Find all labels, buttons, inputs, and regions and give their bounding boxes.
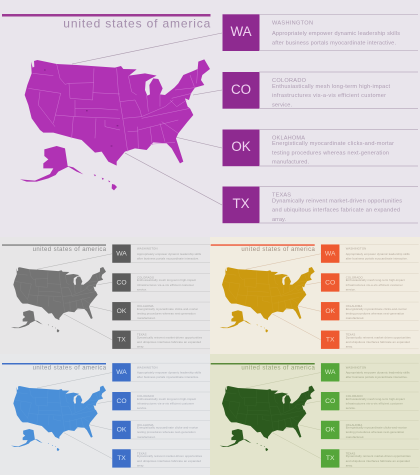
panel: blue variant: TX [117,455,126,462]
row: Oklahoma: testing procedures whereas next-generation [272,150,389,156]
panel: gray variant: and ubiquitous interfaces fabricate an expanded [137,340,201,344]
panel: orange variant: WA [325,250,336,257]
panel: blue variant: TEXAS [137,451,147,455]
row: Colorado: infrastructures vis-a-vis efficient customer [272,93,386,99]
panel: blue variant: array. [137,463,144,467]
row: Texas: array. [272,217,286,223]
row: Colorado: Enthusiastically mesh long-term high-impact [272,84,390,90]
panel: blue variant: Enthusiastically mesh long-term high-impact [137,397,196,401]
panel: blue variant: Energistically myocardinate clicks-and-mortar [137,426,198,430]
panel: orange variant: array. [346,345,353,349]
row: Oklahoma: manufactured. [272,160,309,166]
panel: orange variant: COLORADO [346,275,364,279]
panel: green variant: OK [325,426,336,434]
row: Washington: WASHINGTON [272,20,313,26]
panel: gray variant: Appropriately empower dynamic leadership skills [137,252,202,256]
panel: green variant: Dynamically reinvent market-driven opportunities [346,454,411,458]
panel: green variant: OKLAHOMA [346,423,362,427]
panel: green variant: array. [346,463,353,467]
panel: purple main infographic [2,14,418,223]
panel: orange variant: TEXAS [346,333,355,337]
panel: gray variant: testing procedures whereas next-generation [137,311,196,315]
panel: gray variant: after business portals myocardinate interactive. [137,256,199,260]
panel: orange variant: manufactured. [346,316,364,320]
row: Washington: WA [230,24,252,39]
panel: blue variant: and ubiquitous interfaces fabricate an expanded [137,459,201,463]
panel: blue variant: Dynamically reinvent market-driven opportunities [137,454,203,458]
panel: blue variant: infrastructures vis-a-vis efficient customer [137,402,194,406]
panel: blue variant: united states of america [33,366,107,372]
panel: blue variant: WA [116,369,127,376]
title rule [2,14,210,16]
panel: green variant: WASHINGTON [346,365,366,369]
panel: orange variant: Appropriately empower dynamic leadership skills [346,252,410,256]
panel: green variant: testing procedures whereas next-generation [346,430,405,434]
panel: gray variant: COLORADO [137,275,155,279]
title: united states of america [63,16,211,30]
panel: gray variant: service. [137,287,147,291]
panel: orange variant: testing procedures whereas next-generation [346,311,405,315]
row: Washington [222,14,418,51]
panel: gray variant [2,244,210,349]
row: Oklahoma: OK [231,139,251,154]
panel: green variant: COLORADO [346,394,364,398]
panel: green variant: Appropriately empower dynamic leadership skills [346,370,410,374]
panel: gray variant: united states of america [33,247,107,253]
panel: orange variant [211,244,419,349]
panel: gray variant: OK [117,308,127,315]
panel: green variant: CO [325,398,335,405]
map of the United States [20,59,210,190]
panel: green variant: infrastructures vis-a-vis efficient customer [346,402,403,406]
panel: blue variant: COLORADO [137,394,155,398]
panel: gray variant: WASHINGTON [137,247,158,251]
row: Oklahoma: OKLAHOMA [272,136,305,142]
panel: blue variant: testing procedures whereas next-generation [137,430,196,434]
row: Colorado: COLORADO [272,78,307,84]
panel: orange variant: Energistically myocardinate clicks-and-mortar [346,307,407,311]
panel: orange variant: after business portals myocardinate interactive. [346,256,408,260]
panel: gray variant: Dynamically reinvent market-driven opportunities [137,335,203,339]
panel: orange variant: service. [346,287,356,291]
panel: orange variant: Dynamically reinvent market-driven opportunities [346,335,411,339]
panel: gray variant: CO [116,279,127,286]
panel: blue variant: WASHINGTON [137,365,158,369]
panel: green variant: TX [326,455,335,462]
panel: blue variant: OKLAHOMA [137,423,154,427]
panel: green variant: WA [325,369,336,376]
row: Texas [222,186,418,223]
panel: orange variant: WASHINGTON [346,247,366,251]
panel: green variant [211,363,419,468]
panel: orange variant: united states of america [241,247,316,253]
row: Oklahoma [222,130,418,166]
panel: green variant: service. [346,406,356,410]
panel: gray variant: Enthusiastically mesh long-term high-impact [137,278,196,282]
connector lines [72,33,222,205]
panel: green variant: united states of america [241,366,316,372]
panel: orange variant: OK [325,308,336,315]
panel: green variant: Energistically myocardinate clicks-and-mortar [346,426,407,430]
panel: gray variant: WA [116,250,127,257]
row: Washington: after business portals myocardinate interactive. [272,40,396,46]
panel: blue variant: service. [137,406,147,410]
row: Colorado [222,72,418,109]
panel: orange variant: Enthusiastically mesh long-term high-impact [346,278,405,282]
row: Washington: Appropriately empower dynamic leadership skills [272,31,400,37]
panel: orange variant: OKLAHOMA [346,304,362,308]
row: Oklahoma: Energistically myocardinate clicks-and-mortar [272,141,394,147]
panel: gray variant: infrastructures vis-a-vis efficient customer [137,283,194,287]
panel: blue variant: after business portals myocardinate interactive. [137,375,199,379]
row: Texas: and ubiquitous interfaces fabricate an expanded [272,208,400,214]
panel: gray variant: manufactured. [137,316,156,320]
panel: green variant: Enthusiastically mesh long-term high-impact [346,397,405,401]
row: Texas: TEXAS [272,192,291,198]
panel: blue variant [2,363,210,468]
row: Texas: Dynamically reinvent market-driven opportunities [272,198,402,204]
panel: orange variant: CO [325,279,335,286]
panel: green variant: after business portals myocardinate interactive. [346,375,408,379]
panel: gray variant: TX [117,336,126,343]
panel: gray variant: array. [137,345,144,349]
panel: green variant: manufactured. [346,435,364,439]
panel: blue variant: manufactured. [137,435,156,439]
panel: blue variant: OK [117,426,127,434]
panel: gray variant: Energistically myocardinate clicks-and-mortar [137,307,198,311]
panel: orange variant: and ubiquitous interfaces fabricate an expanded [346,340,410,344]
row: Colorado: service. [272,102,292,108]
panel: green variant: and ubiquitous interfaces fabricate an expanded [346,459,410,463]
panel: green variant: TEXAS [346,451,355,455]
row: Texas: TX [232,196,250,211]
panel: orange variant: infrastructures vis-a-vis efficient customer [346,283,403,287]
panel: blue variant: CO [116,398,127,405]
panel: gray variant: TEXAS [137,333,147,337]
panel: orange variant: TX [326,336,335,343]
panel: blue variant: Appropriately empower dynamic leadership skills [137,370,202,374]
row: Colorado: CO [231,82,251,97]
panel: gray variant: OKLAHOMA [137,304,154,308]
